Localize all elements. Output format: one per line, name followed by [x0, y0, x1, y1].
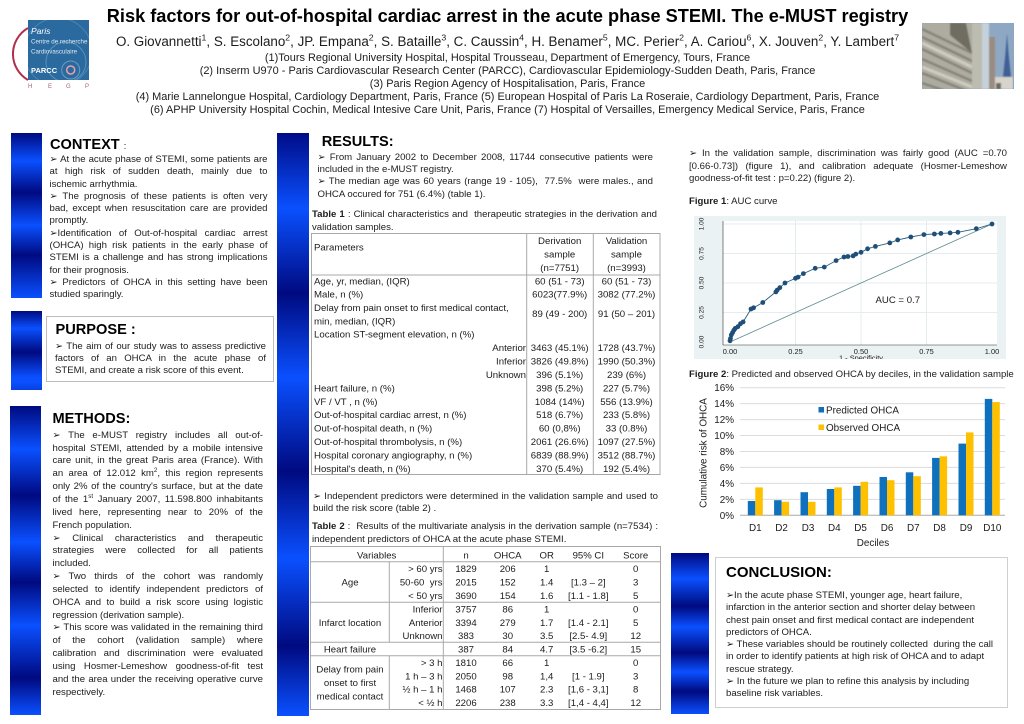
table 2: 206 — [500, 564, 516, 575]
text: methods: using Hosmer-Lemeshow goodness-of-fit test — [52, 661, 263, 672]
table 1: Out-of-hospital death, n (%) — [314, 424, 432, 435]
table 2: > 3 h — [421, 658, 442, 669]
table 2: [2.5- 4.9] — [569, 631, 607, 642]
table 1: 1728 (43.7%) — [598, 343, 655, 354]
panel: methods — [52, 410, 264, 698]
table 1: 89 (49 - 200) — [532, 309, 587, 320]
heading: conclusion: CONCLUSION: — [726, 564, 832, 580]
table 1: 3826 (49.8%) — [531, 356, 589, 368]
text: independent predictors: ➢ Independent predictors were determined in the validation sample and used to — [313, 491, 658, 502]
table 1: 3082 (77.2%) — [598, 290, 655, 301]
text: methods: included. — [52, 558, 91, 569]
logo: PARCC: E — [48, 84, 52, 90]
table 1: 33 (0.8%) — [606, 424, 647, 435]
text: context: studied sparingly. — [50, 289, 123, 300]
table 2: 154 — [500, 591, 516, 602]
text: methods: hospital STEMI, attended by a mobile intensive — [52, 443, 263, 454]
chart: predicted and observed OHCA by deciles: 2% — [720, 495, 734, 506]
affiliations: (3) Paris Region Agency of Hospitalisation, Paris, France — [370, 78, 645, 90]
title: Risk factors for out-of-hospital cardiac arrest in the acute phase STEMI. The e-MUST registry — [107, 6, 908, 26]
table 2: 238 — [500, 698, 516, 709]
text: results intro — [318, 152, 653, 200]
logo: PARCC: Paris — [31, 26, 51, 36]
text: methods: OHCA and to build a risk score using logistic — [52, 597, 263, 608]
chart: predicted and observed OHCA by deciles: D8 — [933, 523, 946, 534]
table 2: 66 — [502, 658, 513, 669]
table 2: Unknown — [402, 631, 442, 642]
affiliations: (4) Marie Lannelongue Hospital, Cardiology Department, Paris, France (5) European Hospital of Paris La Roseraie, Cardiology Department, Paris, France — [136, 91, 879, 103]
caption: table 1 — [312, 208, 657, 233]
table 1: Hospital's death, n (%) — [314, 464, 411, 475]
chart: predicted and observed OHCA by deciles: D7 — [907, 523, 920, 534]
table 2: Infarct location — [319, 618, 381, 629]
table 2: 279 — [500, 618, 516, 629]
text: methods: ➢ Clinical characteristics and therapeutic — [52, 533, 263, 544]
text: purpose: STEMI, and create a risk score of this event. — [55, 365, 244, 376]
table 2: 15 — [630, 644, 641, 656]
text: methods: strategies were collected for all patients — [52, 545, 263, 556]
text: conclusion: chest pain onset and first medical contact are independent — [726, 615, 974, 626]
table 2: 3.3 — [540, 698, 553, 709]
side bar: conclusion — [671, 553, 709, 714]
chart: predicted and observed OHCA by deciles: D6 — [881, 523, 894, 534]
table 2: [1.4 - 2.1] — [568, 618, 609, 629]
table 2: 3 — [633, 672, 638, 682]
text: results intro: ➢ From January 2002 to December 2008, 11744 consecutive patients were — [318, 152, 653, 163]
caption: table 1: Table 1 : Clinical characteristics and therapeutic strategies in the derivation and — [312, 208, 657, 220]
table 2: 1 — [544, 604, 549, 616]
chart: predicted and observed OHCA by deciles: 14% — [714, 399, 734, 410]
table 1: Parameters — [314, 242, 364, 254]
table 1: 398 (5.2%) — [536, 384, 583, 394]
affiliations: (6) APHP University Hospital Cochin, Medical Intesive Care Unit, Paris, France (7) Hospital of Versailles, Emergency Medical Service, Paris, France — [150, 104, 865, 116]
text: discrimination — [689, 148, 1007, 184]
panel: conclusion — [715, 557, 1008, 708]
logo: PARCC: H — [28, 84, 32, 90]
chart: AUC curve: 0.00 — [723, 347, 737, 356]
chart: predicted and observed OHCA by deciles: D10 — [983, 523, 1002, 534]
chart: predicted and observed OHCA by deciles — [698, 383, 1005, 549]
table 2: Anterior — [409, 618, 443, 629]
logo: PARCC: PARCC — [31, 66, 58, 75]
chart: AUC curve — [694, 216, 1006, 359]
table 2: 2.3 — [540, 684, 553, 696]
table 1: 60 (0,8%) — [539, 424, 581, 435]
caption: table 1: validation samples. — [312, 222, 394, 233]
table 2: [1.3 – 2] — [571, 578, 606, 588]
table 2: 4.7 — [540, 644, 553, 656]
table 1: Hospital coronary angiography, n (%) — [314, 450, 472, 462]
table 2: 12 — [630, 698, 641, 709]
table 1: Validation — [606, 236, 647, 247]
table 1: Out-of-hospital thrombolysis, n (%) — [314, 437, 462, 448]
text: methods: of the cohort (validation sample) where — [52, 635, 263, 646]
text: methods: ➢ This score was validated in the remaining third — [52, 622, 263, 633]
text: methods: respectively. — [52, 687, 105, 698]
table 1: 60 (51 - 73) — [535, 276, 585, 288]
table 1: 518 (6.7%) — [536, 410, 583, 421]
table 2: 98 — [502, 672, 513, 682]
text: context: ➢ At the acute phase of STEMI, some patients are — [50, 154, 268, 165]
table 1: Delay from pain onset to first medical contact, — [314, 303, 509, 314]
panel: context — [50, 137, 268, 300]
table 2: 1 h – 3 h — [405, 672, 442, 682]
text: discrimination: ➢ In the validation sample, discrimination was fairly good (AUC =0.70 — [689, 148, 1007, 159]
panel: purpose — [46, 316, 274, 382]
text: methods: care unit, in the great Paris area (France). With — [52, 455, 263, 466]
table 1 — [311, 233, 660, 475]
chart: AUC curve: 0.75 — [698, 247, 706, 260]
text: context: ➢Identification of Out-of-hospital cardiac arrest — [50, 228, 268, 239]
table 2: 1 — [544, 658, 549, 669]
side bar: context — [11, 133, 42, 298]
text: conclusion: rescue strategy. — [726, 664, 794, 675]
table 2: 0 — [633, 604, 638, 616]
table 2: > 60 yrs — [408, 564, 443, 575]
text: methods: selected to identify independent predictors of — [52, 584, 263, 595]
text: context: ➢ Predictors of OHCA in this setting have been — [50, 277, 268, 288]
table 2: Age — [341, 578, 359, 588]
table 2: 3.5 — [540, 631, 553, 642]
table 1: Inferior — [496, 356, 527, 368]
chart: predicted and observed OHCA by deciles: D2 — [775, 523, 788, 534]
side bar: methods — [10, 406, 41, 715]
table 1: 3463 (45.1%) — [531, 343, 589, 354]
table 2: 5 — [633, 591, 638, 602]
table 2: OR — [540, 550, 554, 562]
table 2: [3.5 -6.2] — [569, 644, 607, 656]
table 1: Age, yr, median, (IQR) — [314, 276, 410, 288]
logo: PARCC: P — [85, 84, 89, 90]
chart: predicted and observed OHCA by deciles: 16% — [714, 383, 734, 394]
table 2: Heart failure — [324, 644, 376, 656]
table 1: 227 (5.7%) — [603, 384, 650, 394]
table 1: 1990 (50.3%) — [598, 356, 655, 368]
text: methods: and the area under the receiving operative curve — [52, 674, 263, 685]
table 2: 1829 — [455, 564, 477, 575]
logo: PARCC: Centre de recherche — [31, 39, 88, 46]
photo: building and Eiffel tower — [922, 23, 1014, 89]
table 2: ½ h – 1 h — [402, 684, 442, 696]
chart: AUC curve: 0.25 — [788, 347, 803, 356]
text: results intro: ➢ The median age was 60 years (range 19 - 105), 77.5% were males., and — [318, 176, 653, 187]
chart: predicted and observed OHCA by deciles: D5 — [854, 523, 867, 534]
table 1: 6023(77.9%) — [532, 290, 587, 301]
table 2: 1810 — [455, 658, 477, 669]
table 2: 86 — [502, 604, 513, 616]
text: context: bad, except when resuscitation care are provided — [50, 203, 268, 214]
table 2: 1.7 — [540, 618, 553, 629]
table 1: 370 (5.4%) — [536, 464, 583, 475]
affiliations: (2) Inserm U970 - Paris Cardiovascular Research Center (PARCC), Cardiovascular Epidemiology-Sudden Death, Paris, France — [200, 65, 815, 77]
text: methods: only 2% of the country's surface, but at the date — [52, 481, 263, 492]
logo: PARCC: Cardiovasculaire — [31, 49, 78, 56]
table 1: Male, n (%) — [314, 290, 363, 301]
text: discrimination: goodness-of-fit test : p=0.22) (figure 2). — [689, 173, 855, 184]
table 1: 192 (5.4%) — [603, 464, 650, 475]
text: purpose: ➢ The aim of our study was to assess predictive — [55, 340, 266, 352]
table 1: (n=7751) — [540, 263, 579, 274]
text: conclusion: ➢ In the future we plan to refine this analysis by including — [726, 676, 969, 687]
chart: AUC curve: 1.00 — [698, 217, 706, 230]
table 1: sample — [544, 250, 575, 260]
affiliations: (1)Tours Regional University Hospital, Hospital Trousseau, Department of Emergency, Tours, France — [265, 52, 750, 64]
table 2: 3394 — [455, 618, 477, 629]
text: context: (OHCA) high risk patients in the early phase of — [50, 240, 268, 251]
table 1: 239 (6%) — [607, 370, 646, 381]
chart: predicted and observed OHCA by deciles: D4 — [828, 523, 841, 534]
text: independent predictors: build the risk score (table 2) . — [313, 503, 436, 514]
table 1: Location ST-segment elevation, n (%) — [314, 330, 474, 341]
table 2: Inferior — [413, 604, 443, 616]
text: purpose: factors of an OHCA in the acute phase of — [55, 353, 266, 364]
text: context: promptly. — [50, 215, 88, 226]
text: methods: ➢ The e-MUST registry includes all out-of- — [52, 430, 263, 441]
chart: predicted and observed OHCA by deciles: Predicted OHCA — [826, 406, 899, 416]
logo: PARCC — [12, 20, 89, 90]
affiliations — [136, 52, 879, 116]
table 1: 2061 (26.6%) — [531, 437, 589, 448]
chart: predicted and observed OHCA by deciles: Cumulative risk of OHCA — [698, 398, 710, 508]
table 2: medical contact — [317, 692, 384, 702]
text: conclusion: in order to identify patients at high risk of OHCA and to adapt — [726, 651, 984, 662]
table 2: [1 - 1.9] — [572, 672, 605, 682]
table 1: 396 (5.1%) — [536, 370, 583, 381]
chart: AUC curve: 0.00 — [698, 335, 706, 348]
caption: table 2 — [312, 520, 658, 545]
table 2: 383 — [458, 631, 474, 642]
text: methods: of the 1st January 2007, 11.598.800 inhabitants — [52, 493, 263, 505]
chart: AUC curve: 0.75 — [919, 347, 934, 356]
table 1: Unknown — [486, 370, 526, 381]
chart: predicted and observed OHCA by deciles: Deciles — [857, 538, 889, 549]
text: conclusion: predictors of OHCA. — [726, 627, 812, 638]
table 1: 91 (50 – 201) — [598, 309, 655, 320]
text: conclusion — [726, 590, 993, 699]
heading: purpose: PURPOSE : — [56, 322, 136, 338]
chart: predicted and observed OHCA by deciles: 6% — [720, 463, 734, 474]
text: purpose — [55, 340, 266, 376]
table 2: 3690 — [455, 591, 477, 602]
table 2: 107 — [500, 684, 516, 696]
table 2: 50-60 yrs — [400, 578, 443, 588]
table 2: 2206 — [455, 698, 477, 709]
text: conclusion: ➢ These variables should be routinely collected during the call — [726, 639, 993, 650]
chart: predicted and observed OHCA by deciles: 4% — [720, 479, 734, 490]
chart: predicted and observed OHCA by deciles: 8% — [720, 447, 734, 458]
text: methods: calibration and discrimination were evaluated — [52, 648, 263, 659]
text: context: for their prognosis. — [50, 265, 129, 276]
text: methods: lived here, representing near to 20% of the — [52, 507, 263, 518]
table 2: 2050 — [455, 672, 477, 682]
heading: results: RESULTS: — [322, 134, 394, 150]
logo: PARCC: G — [66, 84, 71, 90]
table 2: 387 — [458, 644, 474, 656]
table 2: 1,4 — [540, 672, 554, 682]
chart: AUC curve: 0.25 — [698, 306, 706, 319]
table 2: 152 — [500, 578, 516, 588]
authors: O. Giovannetti1, S. Escolano2, JP. Empana2, S. Bataille3, C. Caussin4, H. Benamer5, MC. Perier2, A. Cariou6, X. Jouven2, Y. Lambert7 — [116, 33, 899, 49]
table 1: sample — [611, 250, 642, 260]
table 2: 5 — [633, 618, 638, 629]
table 2: 12 — [630, 631, 641, 642]
chart: predicted and observed OHCA by deciles: 12% — [714, 415, 734, 426]
heading: context: CONTEXT : — [50, 137, 126, 153]
table 1: Anterior — [492, 343, 527, 354]
table 2: n — [463, 550, 469, 562]
table 1: Derivation — [538, 236, 581, 247]
table 1: Heart failure, n (%) — [314, 384, 395, 394]
table 1: 1097 (27.5%) — [598, 437, 655, 448]
table 2: 1 — [544, 564, 549, 575]
table 2: 95% CI — [573, 550, 604, 562]
table 2: 3 — [633, 578, 638, 588]
side bar: purpose — [11, 311, 42, 390]
table 2: < ½ h — [418, 698, 442, 709]
table 1: 3512 (88.7%) — [598, 450, 655, 462]
chart: predicted and observed OHCA by deciles: D1 — [749, 523, 762, 534]
table 2: [1,6 - 3,1] — [568, 684, 609, 696]
chart: predicted and observed OHCA by deciles: D3 — [802, 523, 815, 534]
table 2: 1.4 — [540, 578, 554, 588]
text: context: at high risk of sudden death, mainly due to — [50, 166, 268, 177]
table 2: [1.1 - 1.8] — [568, 591, 609, 602]
text: methods: regression (derivation sample). — [52, 610, 184, 621]
chart: AUC curve: 0.50 — [854, 347, 868, 356]
text: methods — [52, 430, 264, 698]
table 2: 84 — [502, 644, 514, 656]
table 2: Score — [623, 550, 648, 562]
text: methods: an area of 12.012 km2, this region represents — [52, 467, 263, 479]
table 1: 60 (51 - 73) — [602, 276, 651, 288]
text: context: STEMI is a challenge and has strong implications — [50, 252, 268, 263]
heading: methods: METHODS: — [52, 410, 130, 426]
chart: AUC curve: 1.00 — [985, 347, 999, 356]
table 1: 233 (5.8%) — [603, 410, 650, 421]
table 1: VF / VT , n (%) — [314, 397, 377, 408]
text: results intro: included in the e-MUST registry. — [318, 164, 454, 175]
table 2: 1.6 — [540, 591, 553, 602]
text: results intro: OHCA occured for 751 (6.4%) (table 1). — [318, 189, 485, 200]
chart: predicted and observed OHCA by deciles: Observed OHCA — [826, 423, 901, 434]
table 2: 0 — [633, 658, 638, 669]
text: methods: ➢ Two thirds of the cohort was randomly — [52, 571, 263, 582]
text: methods: French population. — [52, 520, 132, 531]
text: context: ➢ The prognosis of these patients is often very — [50, 191, 268, 202]
table 2: Delay from pain — [316, 664, 384, 676]
text: conclusion: baseline risk variables. — [726, 688, 823, 699]
table 1: 556 (13.9%) — [600, 397, 653, 408]
table 2: 8 — [633, 684, 638, 696]
table 2: 0 — [633, 564, 638, 575]
text: conclusion: infarction in the anterior section and shorter delay between — [726, 602, 975, 613]
text: context — [50, 154, 268, 300]
chart: predicted and observed OHCA by deciles: D9 — [960, 523, 973, 534]
table 2: OHCA — [494, 550, 522, 562]
table 2: Variables — [357, 550, 397, 562]
caption: figure 2: Figure 2: Predicted and observed OHCA by deciles, in the validation sample — [689, 369, 1014, 380]
table 1: 6839 (88.9%) — [531, 450, 589, 462]
table 2: 2015 — [455, 578, 477, 588]
table 1: Out-of-hospital cardiac arrest, n (%) — [314, 410, 466, 421]
table 1: (n=3993) — [607, 263, 646, 274]
side bar: results — [277, 133, 309, 716]
chart: AUC curve: 0.50 — [698, 276, 706, 289]
table 2: 1468 — [455, 684, 477, 696]
table 2: 30 — [502, 631, 513, 642]
caption: table 2: Table 2 : Results of the multivariate analysis in the derivation sample (n=7534) : — [312, 520, 658, 532]
table 1: 1084 (14%) — [535, 397, 585, 408]
caption: table 2: independent predictors of OHCA at the acute phase STEMI. — [312, 534, 566, 545]
text: context: ischemic arrhythmia. — [50, 179, 137, 190]
table 1: min, median, (IQR) — [314, 316, 395, 328]
text: independent predictors — [313, 491, 658, 514]
caption: figure 1: Figure 1: AUC curve — [689, 196, 778, 207]
chart: predicted and observed OHCA by deciles: 0% — [720, 511, 734, 522]
chart: AUC curve: AUC = 0.7 — [876, 295, 920, 306]
text: conclusion: ➢In the acute phase STEMI, younger age, heart failure, — [726, 590, 962, 601]
table 2: [1,4 - 4,4] — [568, 698, 609, 709]
table 2: 3757 — [455, 604, 477, 616]
chart: predicted and observed OHCA by deciles: 10% — [714, 431, 734, 442]
table 2: onset to first — [324, 678, 376, 689]
table 2 — [310, 546, 661, 710]
table 2: < 50 yrs — [408, 591, 443, 602]
text: discrimination: [0.66-0.73]) (figure 1), and calibration adequate (Hosmer-Lemeshow — [689, 160, 1007, 172]
